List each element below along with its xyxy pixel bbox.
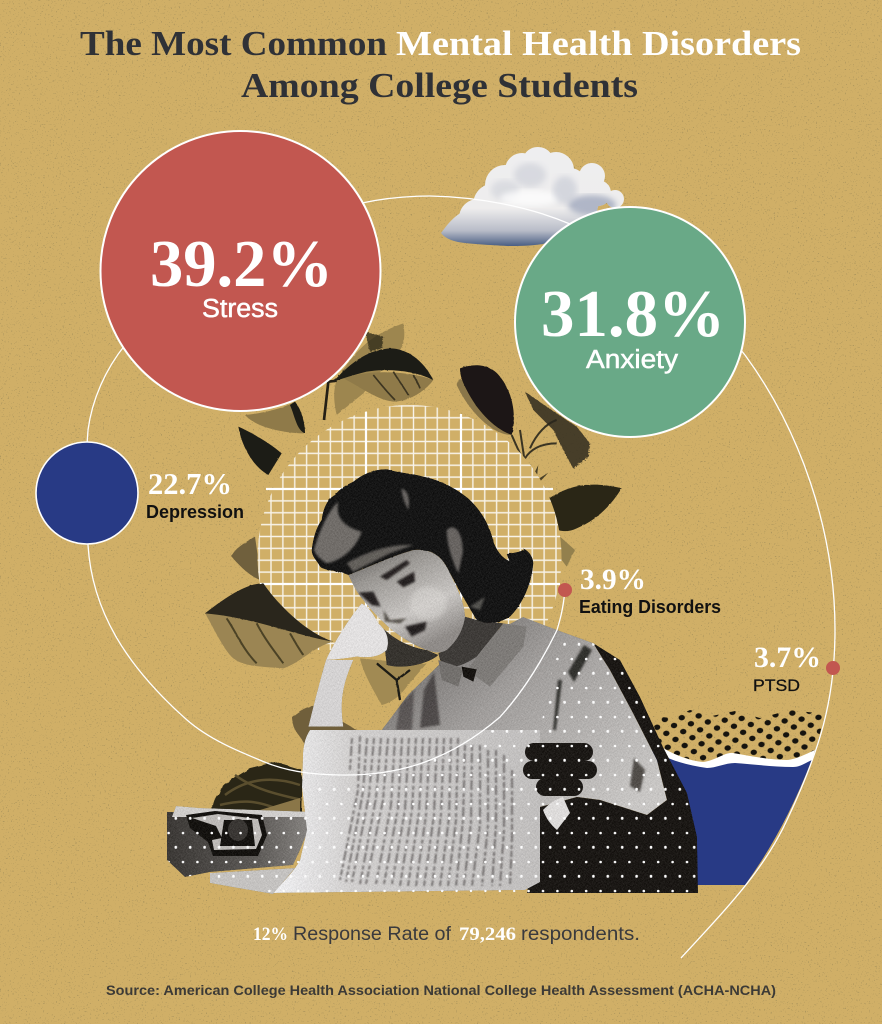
leaf: under stress circle (245, 402, 305, 433)
leaf: black left (238, 427, 282, 475)
sea scene (652, 710, 822, 885)
leaf: bottom-left dark (212, 762, 302, 812)
head and arm (308, 469, 533, 727)
eye and brow shade (358, 560, 427, 637)
ptsd label: PTSD (753, 676, 800, 695)
depression label (146, 467, 244, 522)
paper platen (210, 868, 295, 894)
leaf: behind neck (360, 658, 427, 705)
anxiety label: Anxiety (586, 346, 678, 374)
eating disorders label (579, 564, 721, 617)
shirt (378, 617, 667, 815)
dark hand (532, 752, 588, 787)
leaf: left tan (232, 537, 267, 582)
title (80, 24, 801, 105)
shirt shadows (396, 645, 645, 792)
stress label: Stress (202, 295, 278, 323)
typewriter body (167, 806, 315, 877)
collar left (438, 660, 463, 687)
paper (273, 730, 540, 893)
depression label: 22.7% (148, 467, 232, 501)
response rate note: 12% (253, 924, 288, 945)
leaf: big left (205, 583, 333, 668)
leaves behind grid (232, 323, 622, 582)
ptsd label: 3.7% (754, 642, 821, 674)
leaves in front of grid (205, 583, 427, 705)
nose and cheek highlight (410, 587, 447, 620)
source: Source: American College Health Association National College Health Assessment (ACHA-NCHA) (106, 982, 776, 998)
photo halftone dots (160, 632, 705, 897)
hand (326, 603, 388, 660)
white cuff (543, 797, 570, 830)
leaf: small tan right (560, 537, 575, 567)
grid major lines (260, 412, 560, 608)
handwriting (340, 736, 512, 886)
plant: branch and flowers (512, 392, 590, 482)
photo: woman at typewriter (160, 469, 705, 897)
eating disorders marker (558, 583, 572, 597)
response rate note: Response Rate of (293, 924, 452, 945)
typewriter mechanism (186, 811, 267, 856)
palm shadow (378, 623, 438, 667)
eating disorders label: 3.9% (580, 564, 646, 596)
response rate note (253, 924, 640, 945)
neck (438, 617, 503, 667)
collar gap (462, 667, 477, 682)
leaf: top main (333, 348, 433, 402)
halftone dots (654, 710, 822, 761)
forearm (308, 660, 353, 727)
face (348, 550, 465, 653)
depression bubble (36, 442, 138, 544)
sleeve dark edge and lower arm (527, 643, 698, 893)
title: Among College Students (241, 66, 638, 105)
response rate note: 79,246 (459, 924, 516, 945)
blue water (650, 750, 812, 885)
stem (324, 381, 337, 420)
ptsd marker (826, 661, 840, 675)
depression label: Depression (146, 502, 244, 522)
anxiety bubble (515, 207, 745, 437)
hair highlights (314, 488, 485, 610)
anxiety value: 31.8% (541, 277, 725, 351)
spiral line (86, 196, 835, 958)
flower cluster top (365, 332, 383, 352)
leaf: top pale (334, 323, 404, 415)
leaf: right top (457, 365, 514, 435)
collar right (467, 623, 527, 687)
leaf: low tan (292, 706, 357, 745)
title: The Most Common (80, 24, 387, 63)
response rate note: respondents. (521, 924, 640, 945)
grid circle (258, 405, 562, 650)
stress value: 39.2% (150, 227, 333, 301)
stress bubble (100, 131, 380, 411)
hair (312, 469, 533, 623)
white foam (663, 748, 815, 768)
icon: cloud (436, 145, 631, 247)
eating disorders label: Eating Disorders (579, 597, 721, 617)
leaf: right dark (547, 485, 622, 531)
title: Mental Health Disorders (396, 24, 801, 63)
ptsd label (753, 642, 821, 695)
